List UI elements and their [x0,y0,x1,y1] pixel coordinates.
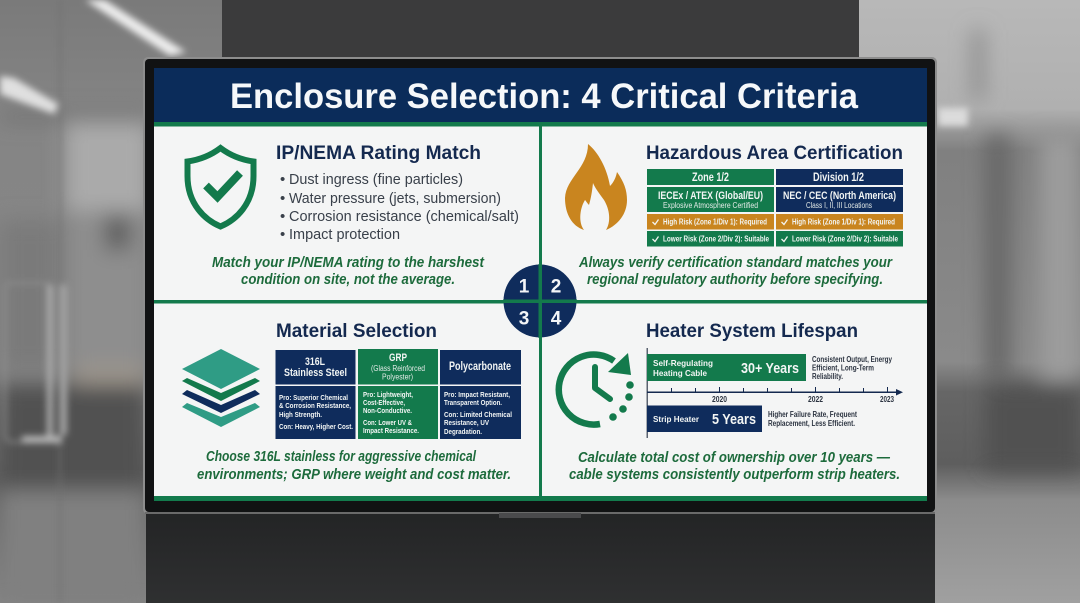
takeaway [212,255,485,288]
bullet list: Impact protection [289,226,400,243]
bullet list: Dust ingress (fine particles) [289,171,463,188]
certification table [647,169,903,246]
center number badge: 1 [519,276,530,298]
wall column [146,0,935,603]
materials table: Con: Limited Chemical [444,410,512,419]
materials table: Non-Conductive. [363,406,412,415]
note: cable benefits [812,355,892,381]
panel 4: heater system lifespan [559,320,903,483]
takeaway [578,255,893,288]
center number badge: 3 [519,308,529,330]
takeaway: environments; GRP where weight and cost matter. [197,467,511,483]
bar: self-regulating cable: Heating Cable [653,368,707,378]
panel 2: hazardous area certification [565,142,903,288]
certification table: Class I, II, III Locations [806,201,872,210]
note: cable benefits: Consistent Output, Energy [812,355,892,364]
lifespan timeline chart [646,348,903,438]
materials table: GRP [389,352,407,364]
heading: Heater System Lifespan [646,320,858,342]
certification table: Zone 1/2 [692,170,729,184]
center number badge: 4 [551,308,562,330]
note: cable benefits: Efficient, Long-Term [812,364,874,372]
timeline axis: 2020 [712,395,727,404]
bar: strip heater [647,406,762,432]
materials table: Con: Lower UV & [363,418,412,427]
takeaway: Choose 316L stainless for aggressive chemical [206,449,477,465]
materials table [276,349,521,439]
heading: IP/NEMA Rating Match [276,142,481,164]
materials table: Resistance, UV [444,418,489,427]
note: strip heater drawbacks [768,410,857,428]
bullet list: • [280,190,285,207]
bar: self-regulating cable [647,354,806,381]
certification table: Explosive Atmosphere Certified [663,201,758,210]
heading: Hazardous Area Certification [646,142,903,164]
materials table: 316L [305,356,325,368]
materials table: Impact Resistance. [363,426,419,435]
center number badge [503,264,577,338]
materials table: High Strength. [279,410,322,419]
monitor bezel [143,57,937,518]
icon: flame [565,144,627,230]
note: strip heater drawbacks: Replacement, Less Efficient. [768,419,855,428]
takeaway: Calculate total cost of ownership over 10 years — [578,450,890,466]
materials table: Cost-Effective, [363,398,405,407]
bar: self-regulating cable: 30+ Years [741,361,799,377]
takeaway: regional regulatory authority before specifying. [587,272,883,288]
bullet list: Water pressure (jets, submersion) [289,190,501,207]
timeline axis [647,387,903,404]
takeaway: Always verify certification standard matches your [578,255,893,271]
certification table: IECEx / ATEX (Global/EU) [658,190,763,202]
screen [154,68,927,501]
note: strip heater drawbacks: Higher Failure Rate, Frequent [768,410,857,419]
panel 1: IP/NEMA rating [188,142,519,288]
takeaway: cable systems consistently outperform strip heaters. [569,467,900,483]
bar: strip heater: 5 Years [712,412,756,428]
timeline axis: 2023 [880,395,894,404]
icon: stacked layers [182,349,260,427]
materials table: Pro: Impact Resistant, [444,390,510,399]
heading: Material Selection [276,320,437,342]
note: cable benefits: Reliability. [812,372,843,381]
materials table: Pro: Lightweight, [363,390,413,399]
bar: self-regulating cable: Self-Regulating [653,358,713,368]
materials table: & Corrosion Resistance, [279,401,351,410]
materials table: Con: Heavy, Higher Cost. [279,422,353,431]
takeaway [569,450,900,483]
bar: strip heater: Strip Heater [653,414,700,424]
title: Enclosure Selection: 4 Critical Criteria [230,77,859,116]
certification table: High Risk (Zone 1/Div 1): Required [792,218,895,226]
certification table: Lower Risk (Zone 2/Div 2): Suitable [663,234,769,244]
bullet list: • [280,208,285,225]
bullet list: • [280,171,285,188]
bullet list: Corrosion resistance (chemical/salt) [289,208,519,225]
materials table: (Glass Reinforced [371,364,425,373]
quadrant dividers [154,126,927,501]
certification table: NEC / CEC (North America) [783,190,896,202]
certification table: Lower Risk (Zone 2/Div 2): Suitable [792,234,898,244]
timeline axis: 2022 [808,395,823,404]
materials table: Stainless Steel [284,367,347,379]
materials table: Polyester) [382,372,413,382]
icon: shield with check [188,148,254,226]
certification table: Division 1/2 [813,170,864,184]
panel 3: material selection [182,320,521,483]
takeaway: condition on site, not the average. [241,272,455,288]
icon: clock with arrow [559,353,634,425]
center number badge: 2 [551,276,561,298]
takeaway [197,449,511,483]
bullet list [280,171,519,243]
materials table: Pro: Superior Chemical [279,393,348,402]
certification table: High Risk (Zone 1/Div 1): Required [663,218,767,226]
materials table: Degradation. [444,427,482,436]
materials table: Transparent Option. [444,398,502,407]
takeaway: Match your IP/NEMA rating to the harshest [212,255,485,271]
title banner [154,68,927,126]
materials table: Polycarbonate [449,361,511,373]
bullet list: • [280,226,285,243]
